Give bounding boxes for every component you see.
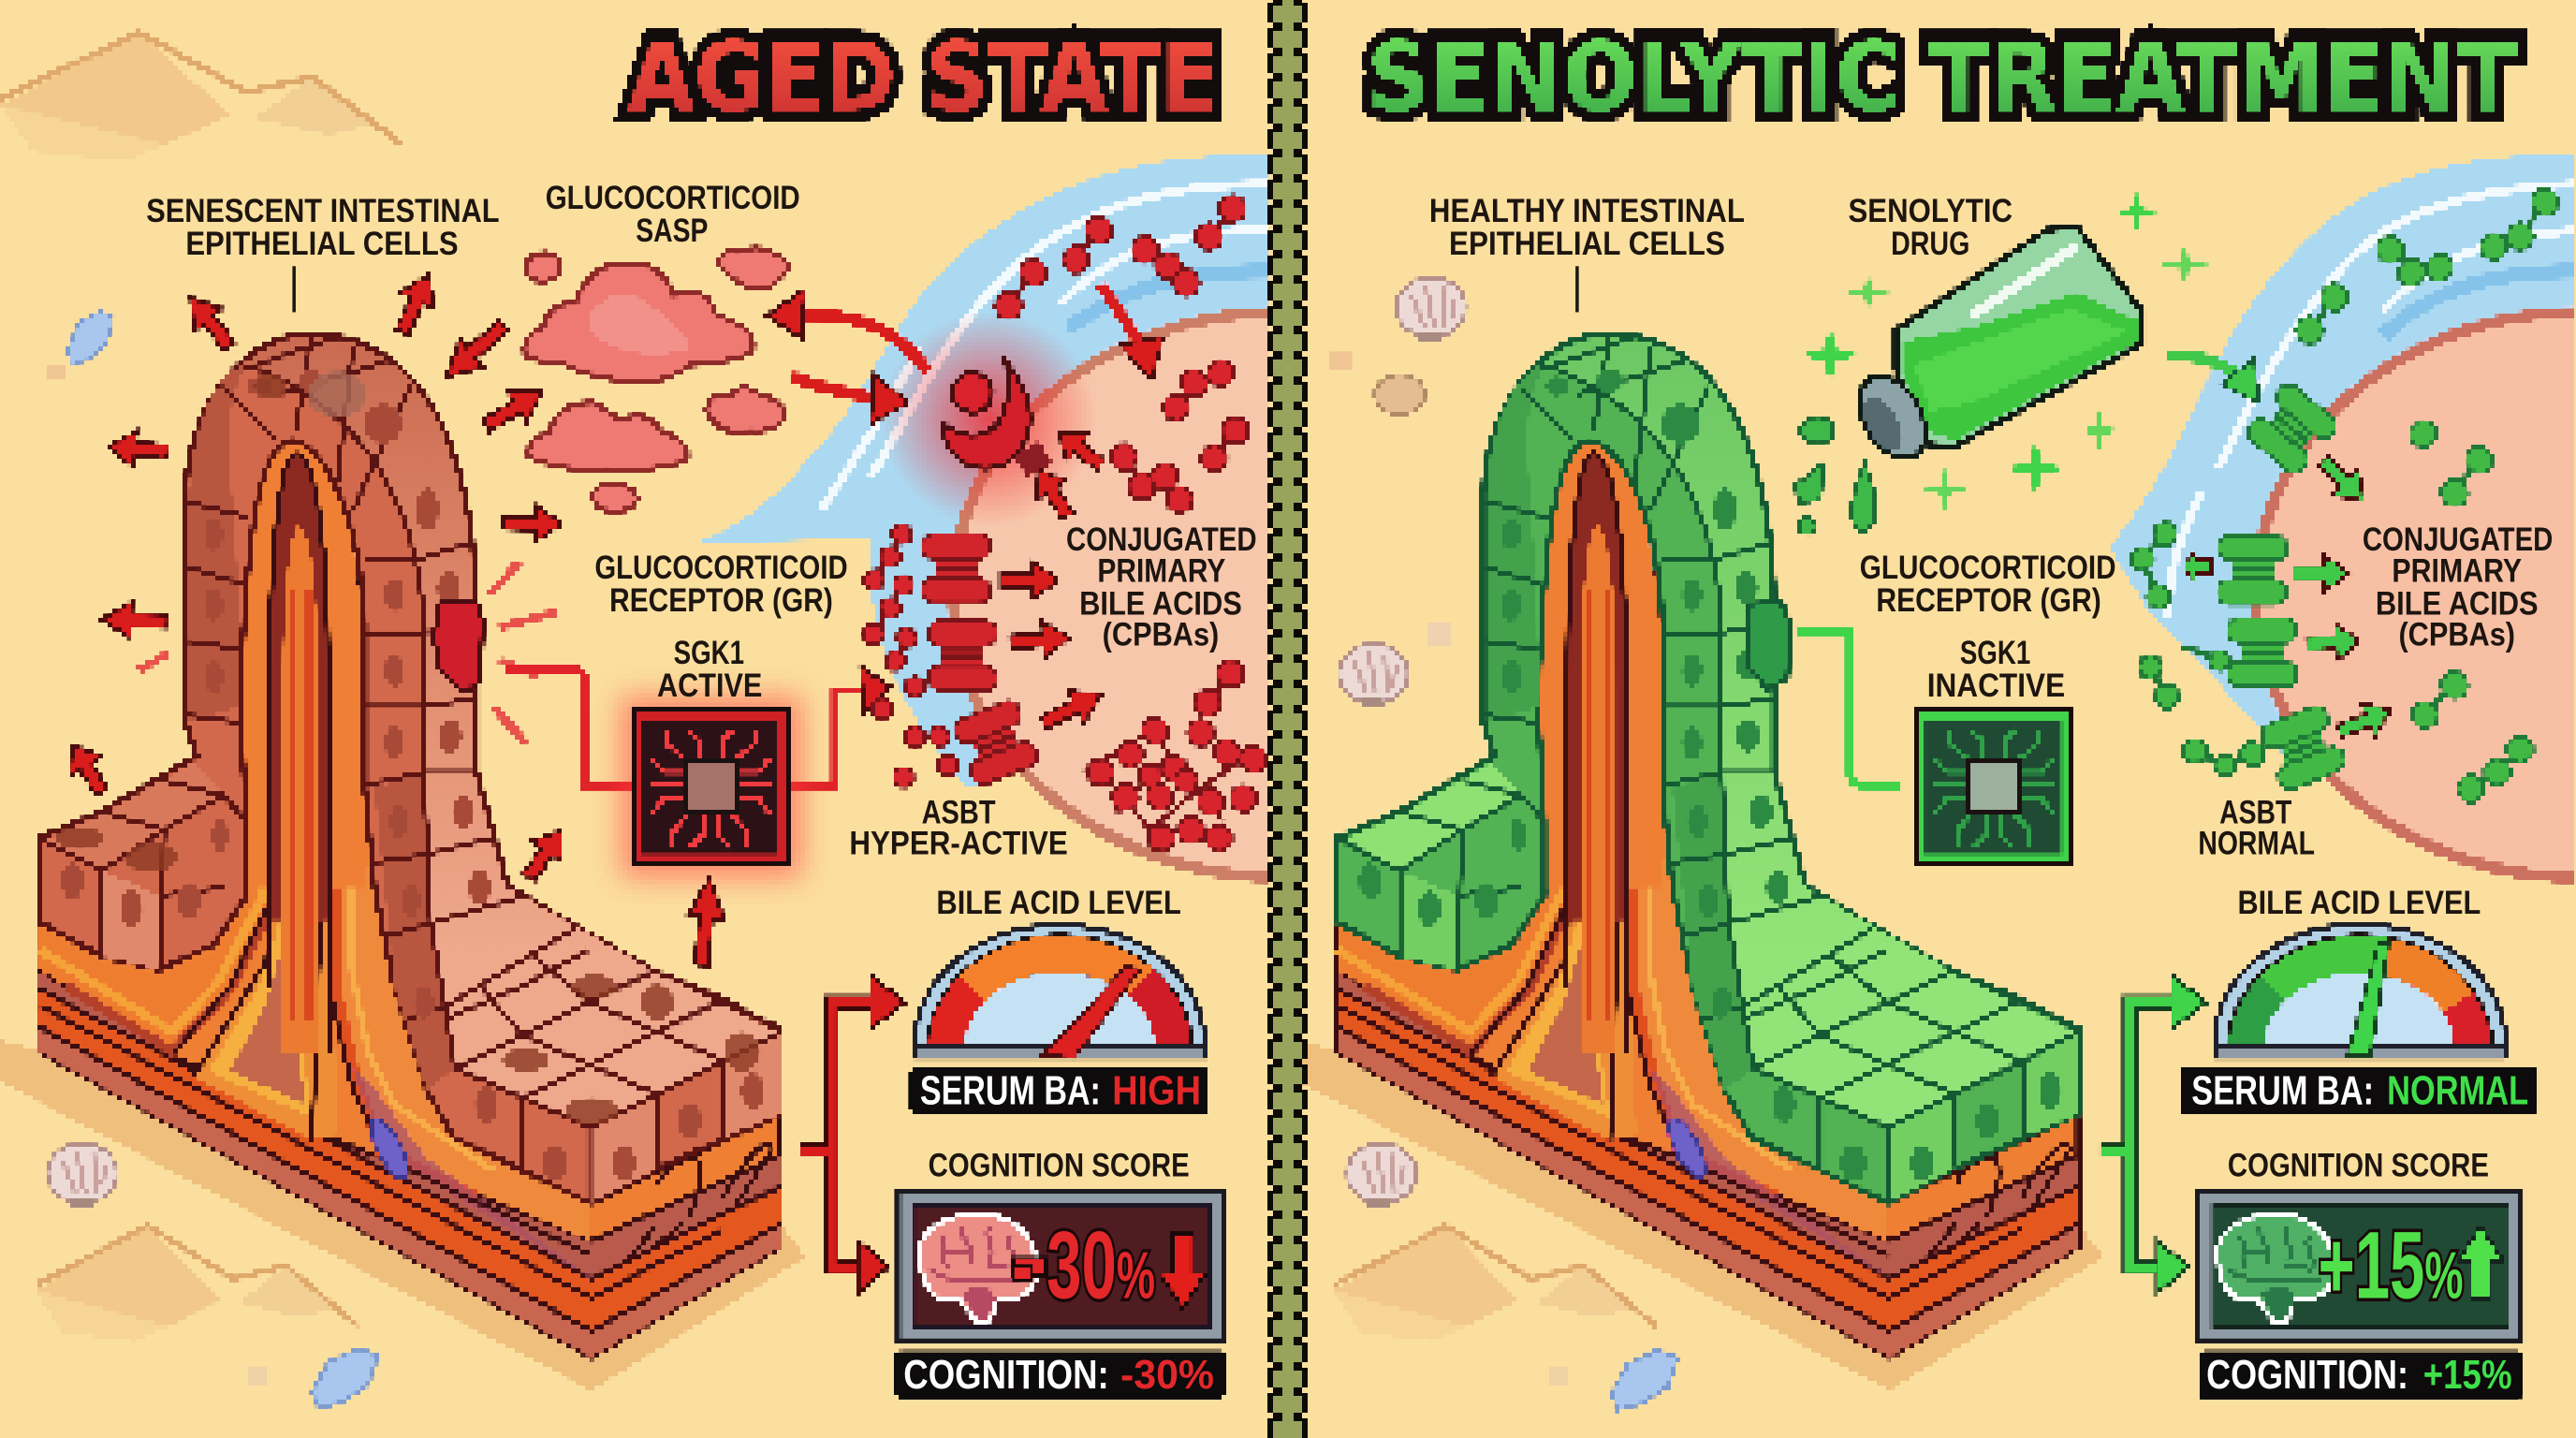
bile acid accumulation cluster (1084, 718, 1266, 851)
label: ASBT hyper-active (849, 794, 1068, 862)
label: healthy cells: EPITHELIAL CELLS (1449, 226, 1725, 262)
pebbles and shells (46, 312, 378, 1408)
label: glucocorticoid SASP: SASP (636, 213, 708, 249)
tissue shadow on sand (0, 1040, 805, 1390)
sparkles (1801, 191, 2207, 510)
label: conjugated primary bile acids: (CPBAs) (1103, 617, 1219, 653)
divider (1267, 0, 1308, 1438)
label: conjugated primary bile acids: (CPBAs) (2398, 617, 2515, 653)
sand dune: top left (0, 33, 402, 161)
panel: senolytic treatment artwork (1298, 155, 2576, 1410)
senescent decay spots (56, 372, 761, 1123)
pill: cognition background (896, 1351, 1225, 1399)
SGK1 inactive chip (1914, 708, 2073, 866)
spark lines around SGK1 (138, 562, 559, 742)
brain icon (2217, 1214, 2334, 1325)
label: bile acid level: BILE ACID LEVEL (2237, 885, 2481, 921)
value: plus 15 percent: +15% (2318, 1213, 2464, 1319)
label: glucocorticoid receptor: GLUCOCORTICOID (1860, 550, 2116, 586)
readout: cognition +15%: COGNITION: (2206, 1352, 2408, 1398)
label: glucocorticoid receptor: GLUCOCORTICOID (594, 550, 848, 586)
label: glucocorticoid receptor: RECEPTOR (GR) (609, 582, 833, 619)
label: ASBT normal: ASBT (2219, 794, 2292, 830)
healthy intestinal tissue (1338, 333, 2078, 1357)
chip glow (621, 697, 801, 877)
labels: aged state (146, 180, 1257, 1398)
tissue shadow on sand (1298, 1040, 2103, 1390)
readout: serum BA normal (2191, 1067, 2528, 1113)
cognition panel background (2198, 1190, 2522, 1339)
connector to outcome readouts (2100, 976, 2206, 1293)
label: SGK1 inactive (1927, 635, 2065, 704)
label: cognition score: COGNITION SCORE (2228, 1148, 2489, 1184)
SASP clouds (524, 248, 787, 511)
title: aged state: AGED STATE (627, 23, 1219, 134)
senolytic drug bottle (1846, 227, 2143, 470)
cytoplasm (945, 305, 1268, 885)
gauge: bile acid level high (915, 925, 1204, 1058)
label: healthy cells (1429, 193, 1745, 312)
label: SGK1 active: ACTIVE (657, 668, 762, 704)
ASBT transporters (2217, 380, 2349, 793)
label: glucocorticoid SASP: GLUCOCORTICOID (546, 180, 800, 216)
sand dune: bottom right panel (1334, 1225, 1656, 1342)
label: SGK1 inactive: INACTIVE (1927, 668, 2065, 704)
drug droplets (1794, 418, 1876, 534)
up arrow (2458, 1225, 2504, 1299)
label: senolytic drug: SENOLYTIC (1848, 193, 2012, 229)
cytoplasm (2256, 312, 2576, 877)
readout: cognition -30%: COGNITION: (903, 1352, 1109, 1398)
readout: serum BA high: HIGH (1112, 1067, 1201, 1113)
readout: serum BA normal: NORMAL (2387, 1067, 2528, 1113)
label: glucocorticoid SASP (546, 180, 800, 249)
value: minus 30 percent: - 30% (1012, 1213, 1155, 1319)
gauge: bile acid level normal (2215, 924, 2506, 1058)
label: glucocorticoid receptor: RECEPTOR (GR) (1876, 582, 2101, 619)
connector to outcome readouts (800, 976, 905, 1293)
blood plasma stream (2110, 155, 2576, 772)
label: conjugated primary bile acids: PRIMARY (2392, 552, 2522, 589)
SGK1 marker inactive (1747, 601, 1791, 690)
pill: cognition background (2198, 1351, 2524, 1399)
readout: cognition -30%: -30% (1120, 1352, 1214, 1398)
label: senolytic drug (1848, 193, 2012, 262)
label: SGK1 inactive: SGK1 (1960, 635, 2030, 671)
down arrow (1160, 1232, 1206, 1308)
label: conjugated primary bile acids: PRIMARY (1097, 552, 1225, 589)
label: SGK1 active: SGK1 (674, 635, 744, 671)
sand dune: bottom left (37, 1225, 359, 1342)
label: ASBT normal: NORMAL (2198, 826, 2315, 862)
label: conjugated primary bile acids (2363, 521, 2553, 653)
cognition panel background (899, 1190, 1222, 1339)
blood plasma stream (698, 155, 1268, 788)
label: ASBT hyper-active: ASBT (922, 794, 996, 830)
label: conjugated primary bile acids: CONJUGATED (1066, 521, 1257, 558)
label: conjugated primary bile acids: BILE ACIDS (2376, 585, 2539, 622)
label: conjugated primary bile acids: BILE ACIDS (1079, 585, 1242, 622)
SGK1 cell marker (433, 601, 483, 694)
labels: senolytic treatment (1429, 193, 2553, 1398)
intestinal tissue (39, 333, 781, 1357)
label: glucocorticoid receptor (1860, 550, 2116, 619)
brain icon (919, 1214, 1037, 1325)
SGK1 to chip signal line (506, 668, 871, 785)
label: senescent cells: EPITHELIAL CELLS (185, 226, 459, 262)
label: senescent cells: SENESCENT INTESTINAL (146, 193, 500, 229)
glucocorticoid receptor crescent (944, 361, 1052, 478)
bile acid molecules (864, 196, 1249, 787)
panel: aged state artwork (0, 28, 1268, 1409)
pebbles and shells (1331, 278, 1677, 1410)
label: glucocorticoid receptor (594, 550, 848, 619)
label: senescent cells (146, 193, 500, 312)
label: SGK1 active (657, 635, 762, 704)
label: conjugated primary bile acids (1066, 521, 1257, 653)
readout: serum BA normal: SERUM BA: (2191, 1067, 2374, 1113)
label: senolytic drug: DRUG (1891, 226, 1969, 262)
label: ASBT hyper-active: HYPER-ACTIVE (849, 826, 1068, 862)
ASBT transporters (922, 534, 1041, 787)
label: bile acid level: BILE ACID LEVEL (936, 885, 1181, 921)
red signal arrows (57, 267, 1164, 966)
titles (627, 23, 2517, 134)
readout: cognition +15%: +15% (2423, 1352, 2512, 1398)
green transport arrows (2167, 355, 2398, 748)
bile acid molecules (2130, 189, 2558, 801)
SGK1 active chip (631, 708, 790, 866)
readout: serum BA high: SERUM BA: (920, 1067, 1101, 1113)
SGK1 to chip line (1799, 631, 1899, 785)
GR glow (881, 311, 1097, 527)
minus bar (1014, 1258, 1045, 1275)
label: cognition score: COGNITION SCORE (929, 1148, 1190, 1184)
label: healthy cells: HEALTHY INTESTINAL (1429, 193, 1745, 229)
pill: serum BA high background (910, 1066, 1209, 1114)
pill: serum BA normal background (2180, 1066, 2539, 1114)
label: ASBT normal (2198, 794, 2315, 862)
